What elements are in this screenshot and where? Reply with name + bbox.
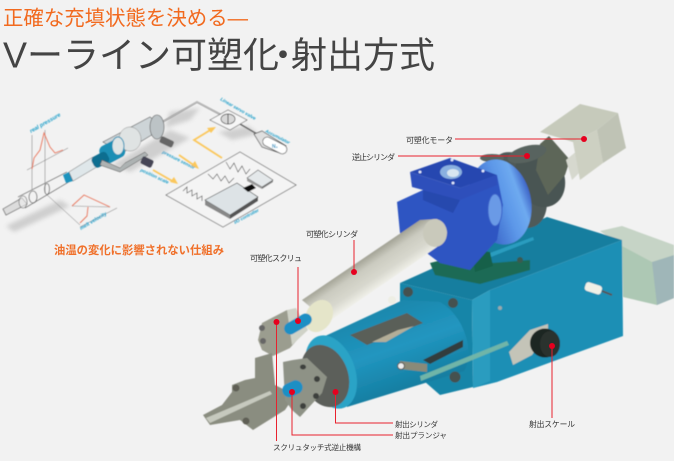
diagram: oil-temperature independent system: [3, 97, 296, 232]
machine illustration: [203, 104, 674, 430]
yellow arrows: [153, 129, 222, 182]
main chip: [205, 183, 258, 215]
actuator cylinder: [90, 115, 175, 172]
callout: check cylinder: 逆止シリンダ: [352, 152, 395, 162]
diagram labels: Accumulator: [264, 128, 291, 145]
title: ・: [265, 34, 301, 76]
title: 射出方式: [291, 34, 435, 76]
diagram shadows: [6, 108, 258, 232]
nozzle lower: [203, 353, 295, 430]
callout: plasticizing motor: 可塑化モータ: [406, 136, 453, 145]
title: [3, 34, 435, 76]
callout: injection plunger: 射出プランジャ: [395, 430, 447, 440]
screw touch check: [280, 378, 305, 400]
diagram labels: pressure sensor: [161, 149, 196, 170]
servo valve: [210, 110, 247, 130]
injection cylinder body: [295, 300, 468, 416]
melt cylinder: [3, 157, 100, 215]
accumulator: [254, 131, 288, 155]
plasticizing screw: [282, 311, 314, 337]
nozzle upper: [258, 308, 308, 356]
connector: [243, 184, 256, 192]
pipes: [157, 102, 227, 125]
callout: plasticizing screw: 可塑化スクリュ: [250, 254, 302, 263]
callout: screw touch check mechanism: [273, 319, 361, 452]
diagram labels: [29, 97, 291, 232]
white bolt: [388, 296, 396, 304]
pressure graph: [27, 130, 68, 193]
diagram caption: 油温の変化に影響されない仕組み: [54, 243, 224, 257]
callout: plasticizing cylinder: [306, 229, 358, 275]
blue housing: [397, 153, 539, 270]
small chip: [247, 170, 273, 187]
diagram labels: melt velocity: [79, 211, 108, 232]
block details: [498, 281, 612, 310]
diagram labels: Linear servo valve: [220, 97, 257, 121]
callout: check cylinder: [352, 152, 530, 162]
title: Vーライン可塑化: [3, 34, 279, 76]
controller plane: [166, 152, 296, 227]
sensors: [159, 136, 175, 148]
callout: injection cylinder: [332, 389, 438, 429]
velocity graph: [45, 193, 117, 227]
green mount: [430, 250, 530, 284]
diagram labels: I/O controller: [233, 208, 260, 225]
injection scale: [530, 328, 560, 358]
callout: injection scale: [529, 343, 575, 429]
callout: injection cylinder: 射出シリンダ: [395, 419, 438, 429]
scale rod: [398, 324, 548, 381]
rear faded unit: [600, 226, 674, 305]
callout: injection scale: 射出スケール: [529, 419, 575, 429]
motor: [540, 104, 626, 180]
plasticizing cylinder: [299, 219, 447, 337]
subtitle: 正確な充填状態を決める—: [3, 7, 249, 30]
callout: plasticizing cylinder: 可塑化シリンダ: [306, 229, 358, 239]
main teal block: [400, 217, 623, 395]
bolts: [403, 287, 460, 382]
callout: screw touch check mechanism: スクリュタッチ式逆止機構: [273, 442, 361, 452]
callout: plasticizing motor: [406, 136, 587, 145]
callout: injection plunger: [289, 389, 447, 440]
diagram labels: real pressure: [29, 112, 62, 135]
diagram labels: position scale: [139, 167, 170, 185]
injection plunger: [283, 338, 358, 417]
accumulator: N₂: [272, 144, 278, 150]
callout: plasticizing screw: [250, 254, 302, 324]
check cylinder dark ring: [478, 136, 584, 237]
